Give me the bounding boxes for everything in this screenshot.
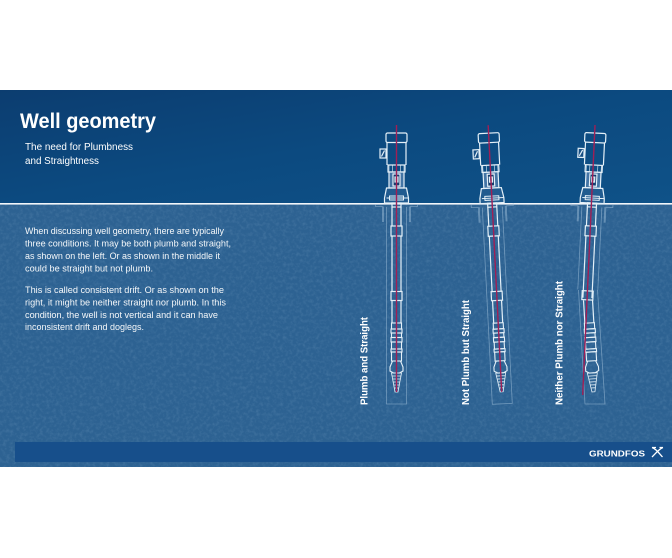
body text: inconsistent drift and doglegs. <box>25 322 144 332</box>
body text <box>25 226 231 332</box>
pump diagram: plumb and straight <box>376 125 418 404</box>
body text: When discussing well geometry, there are typically <box>25 226 224 236</box>
body text: three conditions. It may be both plumb and straight, <box>25 238 231 248</box>
pump diagram: not plumb but straight <box>467 124 523 405</box>
label: plumb and straight: Plumb and Straight <box>360 316 370 405</box>
pump diagram: neither plumb nor straight <box>566 125 616 404</box>
ground line <box>0 203 672 205</box>
slide background: ground <box>0 204 672 467</box>
label: neither plumb nor straight: Neither Plumb nor Straight <box>554 280 566 405</box>
body text: right, it might be neither straight nor plumb. In this <box>25 298 226 308</box>
subtitle: and Straightness <box>25 156 99 167</box>
title: Well geometry <box>20 110 156 133</box>
body text: as shown on the left. Or as shown in the middle it <box>25 251 220 261</box>
logo: Grundfos <box>589 448 663 458</box>
body text: This is called consistent drift. Or as shown on the <box>25 285 224 295</box>
label: not plumb but straight: Not Plumb but Straight <box>461 299 472 405</box>
body text: could be straight but not plumb. <box>25 264 153 274</box>
slide background: sky band <box>0 90 672 204</box>
subtitle: The need for Plumbness <box>25 142 133 153</box>
body text: condition, the well is not vertical and it can have <box>25 310 218 320</box>
subtitle <box>25 142 133 167</box>
logo: Grundfos: GRUNDFOS <box>589 450 646 458</box>
footer band <box>15 442 672 462</box>
